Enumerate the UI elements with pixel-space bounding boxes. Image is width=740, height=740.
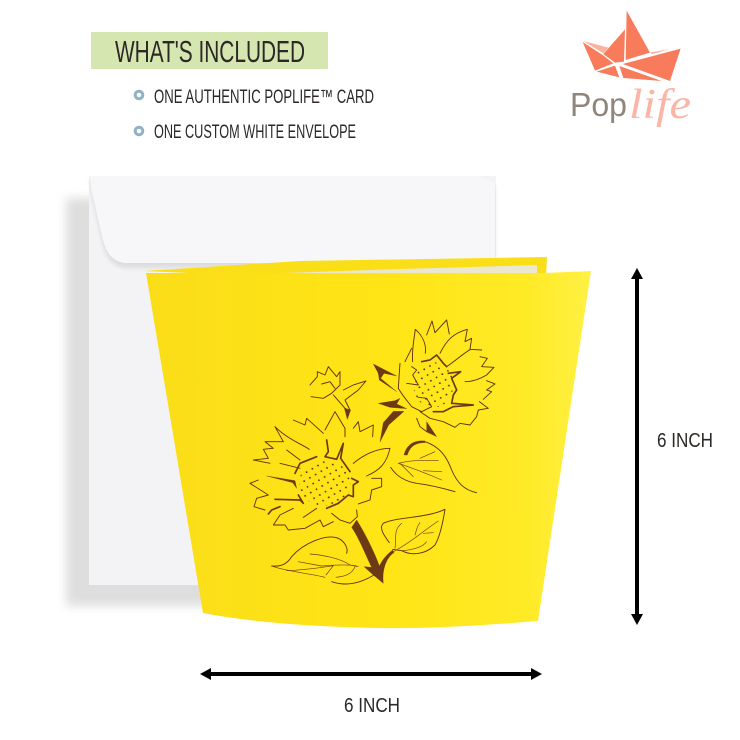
upper right leaf [391,441,477,493]
list of included items [135,87,374,143]
item: white envelope: ONE CUSTOM WHITE ENVELOPE [154,122,356,143]
sunflower illustration [250,320,495,584]
arrow: width dimension [200,668,542,680]
label: height 6 inch: 6 INCH [657,430,713,452]
card back panel [144,257,547,278]
logo: poplife [570,11,691,128]
logo wordmark: life [629,82,691,128]
card inner paper strip [255,265,537,274]
right leaf [382,509,445,554]
envelope [66,176,496,606]
left leaf [272,537,374,584]
item: authentic card [135,87,374,108]
envelope body [89,176,496,585]
envelope shadow [66,198,466,606]
heading: what's included: WHAT'S INCLUDED [115,34,305,69]
lower sunflower [250,412,390,530]
yellow pop-up card [144,257,591,628]
arrow: height dimension [631,268,643,625]
item: authentic card: ONE AUTHENTIC POPLIFE™ CARD [154,87,374,108]
stem and leaves [272,441,477,584]
label: width 6 inch: 6 INCH [344,695,400,717]
item: white envelope [135,122,356,143]
heading: what's included [91,32,328,69]
stem [352,520,394,583]
card front panel [146,271,591,628]
logo wordmark [570,82,691,128]
envelope flap [90,176,495,268]
icon: origami boat [583,11,681,81]
upper sunflower [373,320,495,442]
sunflower bud [310,367,366,419]
logo wordmark: Pop [570,86,627,123]
